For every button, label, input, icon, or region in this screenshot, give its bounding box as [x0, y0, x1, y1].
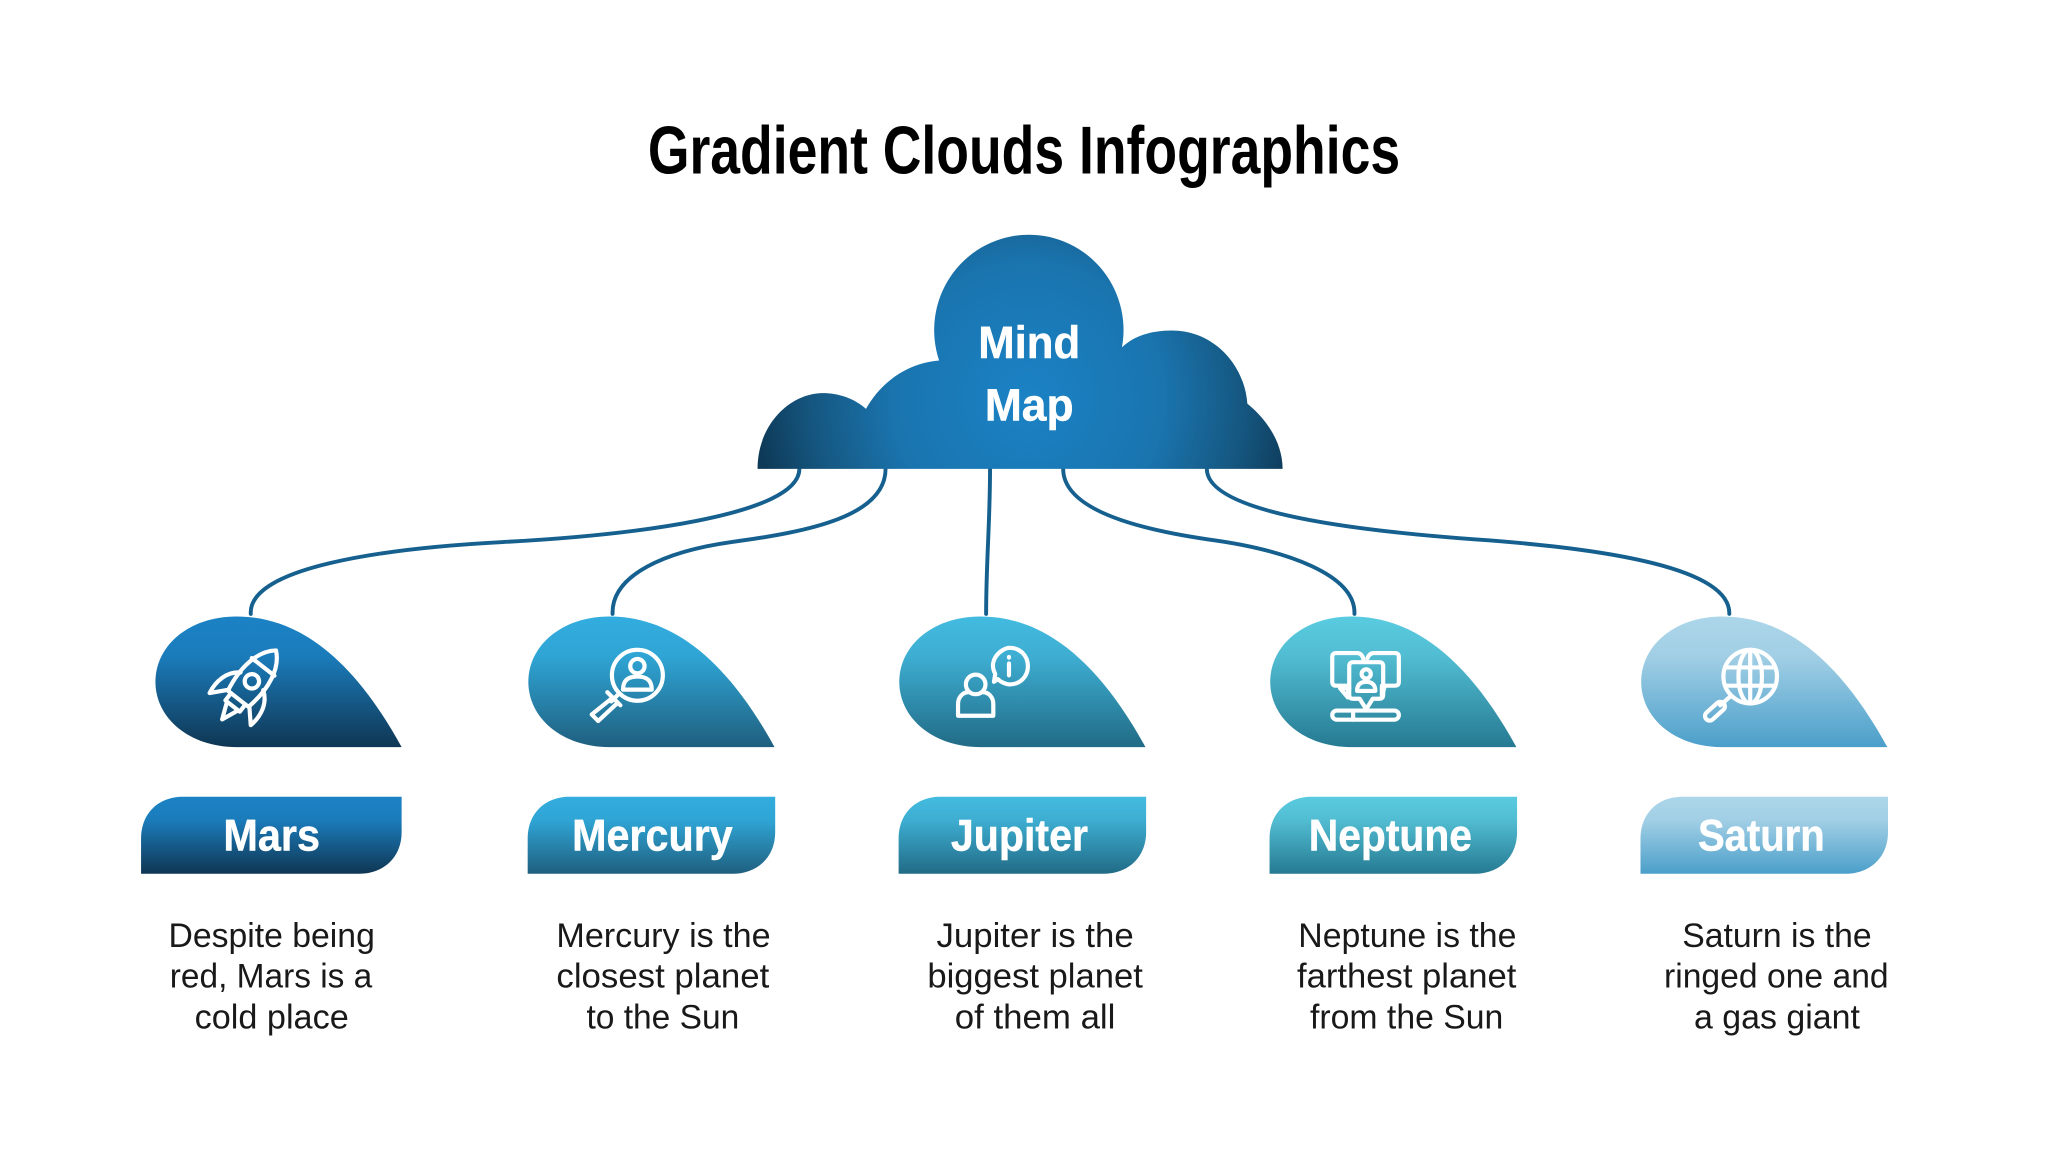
- description: Mars: red, Mars is a: [170, 957, 373, 995]
- teardrop: Mercury: [528, 616, 775, 747]
- description: Jupiter: biggest planet: [927, 957, 1143, 995]
- name tab: Saturn: [1640, 797, 1888, 874]
- description: Mercury: Mercury is the: [556, 917, 771, 955]
- description: Saturn: Saturn is the: [1682, 917, 1872, 955]
- connector: Saturn: [1207, 469, 1729, 614]
- connector: Mercury: [613, 469, 886, 614]
- teardrop: Saturn: [1641, 616, 1887, 747]
- column: Neptune: [1270, 616, 1517, 1037]
- name: Mars: Mars: [223, 811, 320, 860]
- name tab: Jupiter: [899, 797, 1146, 874]
- description: Jupiter: Jupiter is the: [936, 917, 1134, 955]
- name tab: Mercury: [528, 797, 775, 874]
- description: Mars: Despite being: [168, 917, 375, 955]
- description: Jupiter: of them all: [955, 999, 1115, 1037]
- title: Gradient Clouds Infographics: [648, 114, 1400, 189]
- name: Mercury: Mercury: [572, 811, 733, 860]
- icon: profile bubbles with progress bar: [1332, 653, 1399, 720]
- description: Saturn: a gas giant: [1694, 999, 1860, 1037]
- cloud shape: [758, 235, 1283, 469]
- teardrop: Mars: [155, 616, 402, 747]
- description: Neptune: farthest planet: [1297, 957, 1517, 995]
- name: Jupiter: Jupiter: [951, 811, 1088, 860]
- icon: rocket: [201, 634, 297, 736]
- column: Jupiter: [899, 616, 1146, 1037]
- description: Mars: cold place: [195, 999, 349, 1037]
- description: Neptune: from the Sun: [1310, 999, 1503, 1037]
- column: Saturn: [1640, 616, 1889, 1037]
- name: Saturn: Saturn: [1698, 811, 1825, 860]
- cloud label: Mind: [978, 317, 1080, 368]
- name: Neptune: Neptune: [1309, 811, 1472, 860]
- name tab: Neptune: [1270, 797, 1517, 874]
- description: Mercury: closest planet: [556, 957, 770, 995]
- connector: Neptune: [1063, 469, 1354, 614]
- icon: globe magnifier: [1703, 650, 1777, 722]
- description: Mercury: to the Sun: [586, 999, 739, 1037]
- connector: Jupiter: [986, 469, 990, 614]
- description: Saturn: ringed one and: [1664, 957, 1889, 995]
- teardrop: Jupiter: [899, 616, 1145, 747]
- column: Mars: [141, 616, 402, 1037]
- connectors from cloud to planets: [251, 469, 1729, 614]
- teardrop: Neptune: [1270, 616, 1516, 747]
- icon: magnifier with person: [592, 650, 663, 721]
- central cloud: Mind Map: [758, 235, 1283, 469]
- connector: Mars: [251, 469, 799, 614]
- description: Neptune: Neptune is the: [1298, 917, 1516, 955]
- name tab: Mars: [141, 797, 402, 874]
- column: Mercury: [528, 616, 775, 1037]
- icon: person with info bubble: [958, 648, 1028, 716]
- cloud label: Map: [985, 380, 1074, 431]
